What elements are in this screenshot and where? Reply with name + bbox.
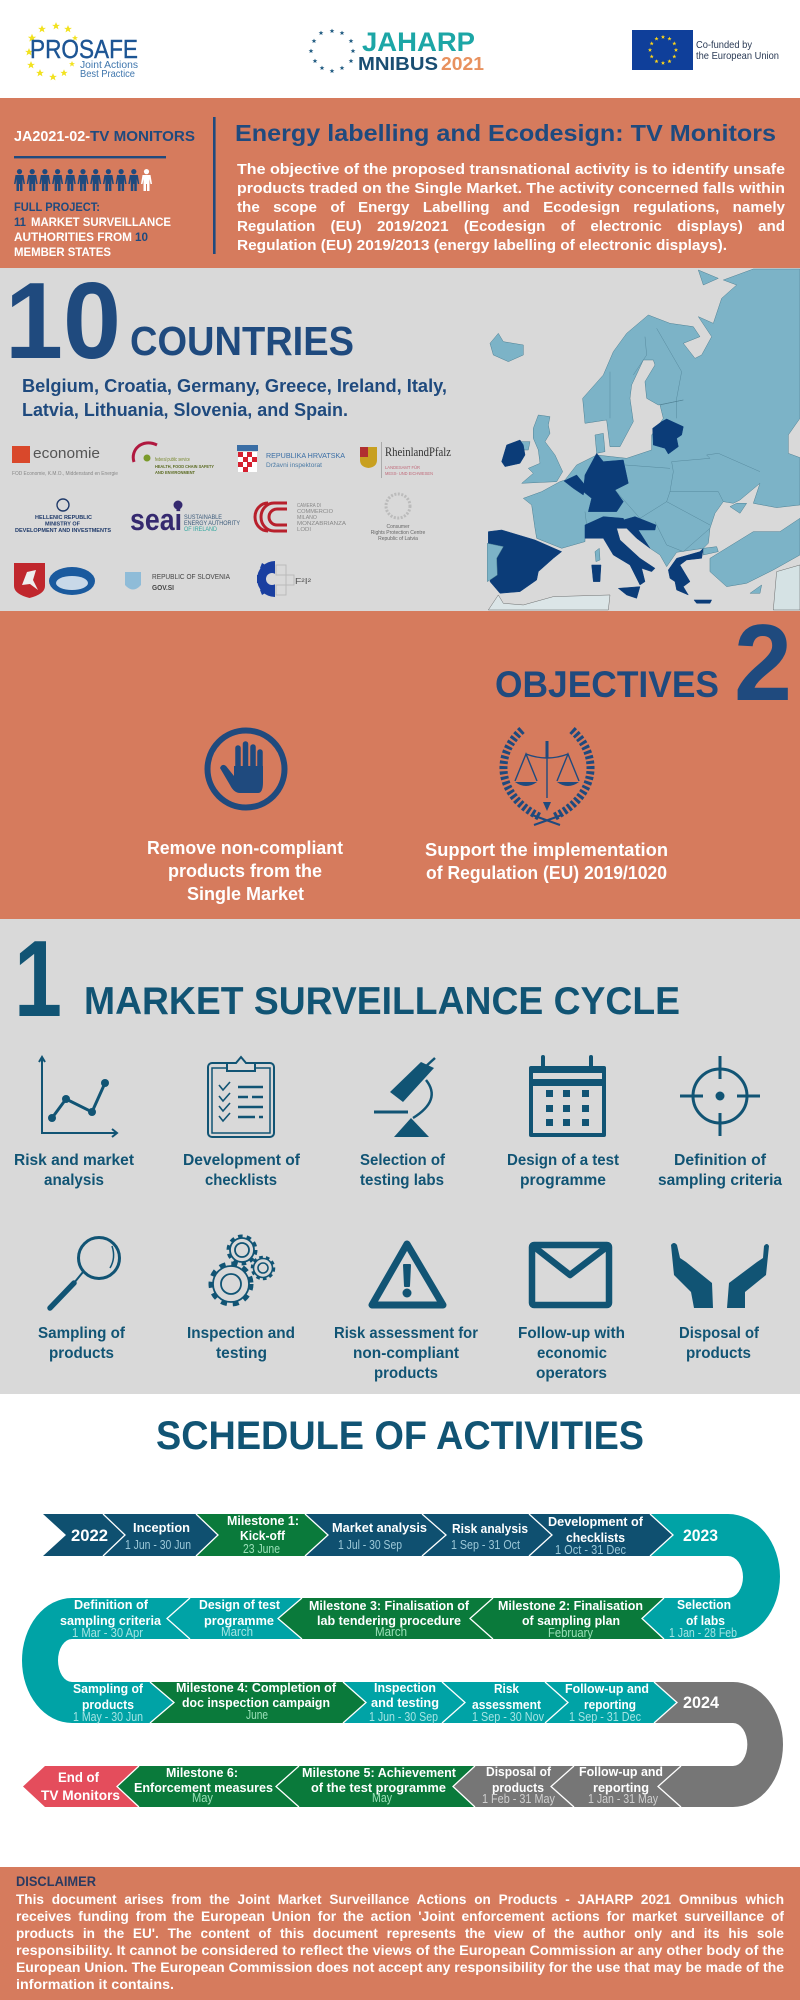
step: design of test programme: Design of test (199, 1598, 281, 1612)
panel: market surveillance cycle (0, 918, 800, 1394)
milestone 5 (302, 1766, 457, 1805)
full project text: 10 (135, 230, 148, 244)
step: risk assessment (334, 1244, 478, 1382)
step: design of test programme (199, 1598, 281, 1639)
step: development of checklists: Development of (548, 1515, 644, 1529)
step: inception: 1 Jun - 30 Jun (125, 1538, 191, 1552)
heading: objectives (495, 602, 792, 724)
Iceland (490, 333, 523, 362)
country list (22, 376, 447, 420)
step: risk assessment: 1 Sep - 30 Nov (472, 1710, 545, 1724)
heading: objectives: OBJECTIVES (495, 664, 719, 705)
step: disposal of products (671, 1243, 769, 1362)
step: inspection and testing: Inspection and (187, 1325, 295, 1342)
disclaimer body: This document arises from the Joint Market Surveillance Actions on Products - JAHARP 2021 Omnibus which (16, 1892, 784, 1907)
step: disposal of products (482, 1765, 556, 1806)
logo: Republika Hrvatska (237, 445, 345, 472)
project code: TV MONITORS (90, 128, 195, 145)
logo: JAHARP Omnibus 2021: JAHARP (362, 27, 475, 57)
objective paragraph: Regulation (EU) 2019/2013 (energy labelling of electronic displays). (237, 237, 727, 254)
logo: federal public service: AND ENVIRONMENT (155, 470, 195, 475)
heading: market surveillance cycle: MARKET SURVEILLANCE CYCLE (84, 980, 680, 1023)
logo: Hellenic Republic (15, 499, 111, 534)
step: inspection and testing: and testing (371, 1696, 439, 1710)
logo: F2I2 (257, 561, 311, 597)
step: disposal of products: products (492, 1781, 544, 1795)
step: risk assessment: non-compliant (353, 1345, 459, 1362)
step: risk assessment: Risk (494, 1682, 519, 1696)
step: risk and market analysis: analysis (44, 1172, 104, 1189)
milestone 6 (134, 1766, 273, 1805)
end of TV Monitors: TV Monitors (41, 1787, 120, 1803)
logo: Republic of Slovenia: GOV.SI (152, 585, 174, 592)
year 2024: 2024 (683, 1694, 720, 1712)
step: follow-up and reporting 2024 (579, 1765, 663, 1806)
Corsica (595, 548, 600, 562)
logo: JAHARP Omnibus 2021 (309, 27, 484, 74)
step: design of test programme: March (221, 1625, 253, 1639)
logo: Consumer Rights Protection Centre Latvia (371, 494, 425, 542)
step: selection of testing labs: Selection of (360, 1152, 446, 1169)
step: disposal of products: products (686, 1345, 751, 1362)
icon: stop hand (208, 730, 284, 808)
milestone 6: May (192, 1791, 214, 1805)
step: design of a test programme (507, 1057, 619, 1189)
milestone 1: Kick-off (240, 1529, 286, 1543)
full project text: AUTHORITIES FROM (14, 230, 132, 244)
heading: schedule of activities: SCHEDULE OF ACTIVITIES (156, 1414, 644, 1458)
step: inspection and testing: testing (216, 1345, 267, 1362)
step: definition of sampling criteria (60, 1598, 162, 1640)
step: sampling of products: products (49, 1345, 114, 1362)
logo: Camera di Commercio: CAMERA DI (297, 503, 321, 509)
disclaimer body: responsibility. It cannot be considered to reflect the views of the European Commission ar any other body of the (16, 1943, 785, 1958)
step: selection of testing labs (360, 1058, 446, 1189)
logo: Republika Hrvatska: REPUBLIKA HRVATSKA (266, 453, 345, 460)
step: selection of labs: 1 Jan - 28 Feb (669, 1626, 737, 1640)
logo: Consumer Rights Protection Centre Latvia: Consumer (386, 524, 410, 530)
panel: objectives (0, 602, 800, 919)
timeline track (22, 1514, 783, 1807)
step: risk assessment: assessment (472, 1698, 542, 1712)
step: development of checklists: Development of (183, 1152, 301, 1169)
step: follow-up and reporting: reporting (584, 1698, 636, 1712)
step: sampling of products (73, 1682, 144, 1724)
step: definition of sampling criteria: sampling criteria (658, 1172, 782, 1189)
icon: eleven people (14, 169, 152, 191)
disclaimer body: products in the EU'. The content of this document represents the view of the author only and its his sole (16, 1926, 784, 1941)
disclaimer body (16, 1892, 785, 1992)
logo: economie (12, 445, 118, 477)
logo: PROSAFE: Joint Actions (80, 59, 138, 71)
logo: Camera di Commercio: MONZABRIANZA (297, 521, 346, 527)
step: market analysis: Market analysis (332, 1521, 427, 1535)
logo: JAHARP Omnibus 2021: MNIBUS (358, 54, 438, 74)
logo: Consumer Rights Protection Centre Latvia: Republic of Latvia (378, 536, 418, 542)
milestone 2: Milestone 2: Finalisation (498, 1599, 643, 1613)
disclaimer heading: DISCLAIMER (16, 1874, 96, 1889)
Arctic islands (698, 270, 718, 285)
logo: Hellenic Republic: DEVELOPMENT AND INVESTMENTS (15, 528, 111, 534)
map of Europe (487, 269, 800, 610)
milestone 1: Milestone 1: (227, 1514, 299, 1528)
step: disposal of products: Disposal of (486, 1765, 552, 1779)
logo: SEAI: ENERGY AUTHORITY (184, 521, 240, 527)
step: risk analysis: Risk analysis (452, 1522, 528, 1536)
step: follow-up and reporting: Follow-up and (565, 1682, 649, 1696)
year 2023: 2023 (683, 1527, 718, 1545)
year 2022: 2022 (71, 1527, 108, 1545)
page header with logos (0, 0, 800, 98)
step: sampling of products: Sampling of (38, 1325, 126, 1342)
milestone 2: February (548, 1626, 594, 1640)
step: design of a test programme: Design of a test (507, 1152, 619, 1169)
logo: economie: FOD Economie, K.M.O., Middenstand en Energie (12, 471, 118, 477)
objective: remove products: Remove non-compliant (147, 837, 343, 858)
milestone 2: of sampling plan (522, 1614, 620, 1628)
logo: Rheinland-Pfalz: MESS- UND EICHWESEN (385, 471, 433, 476)
step: follow-up and reporting (565, 1682, 649, 1724)
logo: Rheinland-Pfalz: RheinlandPfalz (385, 444, 451, 459)
logo: Rheinland-Pfalz: LANDESAMT FÜR (385, 464, 421, 470)
heading: 10 countries: 10 (5, 260, 121, 382)
logo: federal public service: federal public service (155, 457, 190, 463)
icon: laurel wreath and scales (503, 730, 591, 825)
step: definition of sampling criteria: 1 Mar - 30 Apr (72, 1626, 143, 1640)
panel: disclaimer (0, 1867, 800, 2000)
logo: Rheinland-Pfalz (360, 442, 451, 478)
logo: Camera di Commercio: COMMERCIO (297, 509, 334, 515)
milestone 4: Milestone 4: Completion of (176, 1681, 337, 1695)
project code: JA2021-02- (14, 128, 90, 145)
Denmark (595, 433, 605, 453)
step: selection of labs: Selection (677, 1598, 731, 1612)
milestone 3: lab tendering procedure (317, 1614, 461, 1628)
logo: federal public service: HEALTH, FOOD CHAIN SAFETY (155, 464, 214, 469)
objective: support regulation: of Regulation (EU) 2019/1020 (426, 862, 667, 883)
step: inception (125, 1521, 191, 1552)
objective paragraph: The objective of the proposed transnational activity is to identify unsafe (237, 161, 785, 178)
step: risk assessment (472, 1682, 545, 1724)
milestone 3: March (375, 1625, 407, 1639)
logo: JAHARP Omnibus 2021: 2021 (441, 54, 484, 74)
step: inspection and testing: 1 Jun - 30 Sep (369, 1710, 438, 1724)
full project text (14, 200, 171, 259)
milestone 6: Enforcement measures (134, 1781, 273, 1795)
milestone 5: Milestone 5: Achievement (302, 1766, 457, 1780)
logo: Republika Hrvatska: Državni inspektorat (266, 462, 322, 469)
logo: Camera di Commercio: LODI (297, 527, 312, 533)
panel: 10 countries (0, 260, 800, 611)
step: follow-up and reporting 2024: 1 Jan - 31 May (588, 1792, 659, 1806)
step: risk and market analysis (14, 1057, 134, 1189)
logo: Lithuania (14, 563, 95, 598)
objective paragraph: the scope of Energy Labelling and Ecodesign regulations, namely (237, 199, 786, 216)
logo: PROSAFE: PROSAFE (30, 34, 138, 64)
logo: F2I2: F²I² (295, 577, 311, 586)
step: disposal of products: 1 Feb - 31 May (482, 1792, 556, 1806)
step: risk assessment: products (374, 1365, 438, 1382)
step: definition of sampling criteria: sampling criteria (60, 1614, 162, 1628)
end of TV Monitors: End of (58, 1769, 99, 1785)
step: selection of testing labs: testing labs (360, 1172, 444, 1189)
step: design of a test programme: programme (520, 1172, 606, 1189)
objective paragraph (237, 161, 786, 254)
milestone 1: 23 June (243, 1542, 280, 1556)
dark participating countries (488, 419, 712, 603)
logo: EU flag, co-funded by the European Union (632, 30, 779, 70)
step: follow-up with economic operators: operators (536, 1365, 607, 1382)
objective: support regulation: Support the implementation (425, 839, 668, 860)
step: definition of sampling criteria: Definition of (674, 1152, 767, 1169)
step: inspection and testing (187, 1236, 295, 1362)
logo: Hellenic Republic: HELLENIC REPUBLIC (35, 515, 92, 521)
objective paragraph: products traded on the Single Market. The activity concerned falls within (237, 180, 785, 197)
logo: EU flag, co-funded by the European Union: Co-funded by (696, 39, 753, 51)
step: development of checklists (183, 1057, 301, 1189)
logo: economie: economie (33, 445, 100, 462)
objective: remove products: Single Market (187, 883, 304, 904)
milestone 3 (309, 1599, 470, 1639)
logo: Hellenic Republic: MINISTRY OF (45, 522, 80, 528)
milestone 4: June (246, 1708, 268, 1722)
objective: remove products: products from the (168, 860, 322, 881)
step: inception: Inception (133, 1521, 190, 1535)
heading: 10 countries: COUNTRIES (130, 318, 354, 364)
step: sampling of products: Sampling of (73, 1682, 144, 1696)
step: risk assessment: Risk assessment for (334, 1325, 478, 1342)
step: definition of sampling criteria (658, 1056, 782, 1189)
step: disposal of products: Disposal of (679, 1325, 760, 1342)
full project text: 11 (14, 215, 26, 229)
full project text: MEMBER STATES (14, 245, 111, 259)
full project text: MARKET SURVEILLANCE (31, 215, 171, 229)
step: development of checklists (548, 1515, 644, 1557)
Turkey (710, 518, 800, 587)
step: sampling of products (38, 1238, 126, 1362)
objective: support regulation (425, 839, 668, 883)
logo: SEAI (130, 500, 240, 537)
objective paragraph: Regulation (EU) 2019/2021 (Ecodesign of electronic displays) and (237, 218, 785, 235)
disclaimer body: information it contains. (16, 1977, 174, 1992)
step: definition of sampling criteria: Definition of (74, 1598, 149, 1612)
logo: Republic of Slovenia (125, 572, 230, 592)
milestone 4: doc inspection campaign (182, 1696, 330, 1710)
disclaimer body: European Union. The European Commission does not accept any responsibility for the use that may be made of the (16, 1960, 784, 1975)
heading: 10 countries (5, 260, 354, 382)
logo: Republic of Slovenia: REPUBLIC OF SLOVENIA (152, 572, 230, 581)
heading: market surveillance cycle: 1 (14, 918, 62, 1040)
step: inspection and testing (369, 1681, 439, 1724)
UK and Ireland light parts (522, 415, 563, 483)
milestone 5: of the test programme (311, 1781, 446, 1795)
milestone 1 (227, 1514, 299, 1556)
milestone 4 (176, 1681, 337, 1722)
logo: PROSAFE (25, 22, 138, 80)
heading: market surveillance cycle (14, 918, 680, 1040)
step: development of checklists: checklists (205, 1172, 277, 1189)
step: inspection and testing: Inspection (374, 1681, 436, 1695)
country list: Latvia, Lithuania, Slovenia, and Spain. (22, 400, 348, 420)
step: selection of labs: of labs (686, 1614, 725, 1628)
step: design of test programme: programme (204, 1614, 274, 1628)
logo: federal public service (133, 443, 214, 475)
disclaimer body: receives funding from the European Union for the action 'Joint enforcement actions for market surveillance of (16, 1909, 785, 1924)
logo: Camera di Commercio: MILANO (297, 515, 318, 521)
internal borders (585, 328, 760, 552)
milestone 2 (498, 1599, 643, 1640)
step: risk analysis: 1 Sep - 31 Oct (451, 1538, 520, 1552)
logo: Consumer Rights Protection Centre Latvia: Rights Protection Centre (371, 530, 425, 536)
logo: SEAI: OF IRELAND (184, 527, 218, 533)
step: selection of labs (669, 1598, 737, 1640)
logo: SEAI: SUSTAINABLE (184, 515, 222, 521)
mainland light countries (523, 269, 800, 567)
step: follow-up and reporting: 1 Sep - 31 Dec (569, 1710, 641, 1724)
North Africa and Middle East (488, 595, 610, 610)
objective: remove products (147, 837, 343, 904)
full project text: FULL PROJECT: (14, 200, 100, 214)
step: development of checklists: checklists (566, 1531, 625, 1545)
heading: objectives: 2 (734, 602, 792, 724)
step: sampling of products: 1 May - 30 Jun (73, 1710, 143, 1724)
step: market analysis: 1 Jul - 30 Sep (338, 1538, 402, 1552)
logo: SEAI: seai (130, 502, 182, 537)
step: follow-up with economic operators: economic (537, 1345, 607, 1362)
logo: EU flag, co-funded by the European Union: the European Union (696, 50, 779, 62)
step: risk and market analysis: Risk and market (14, 1152, 134, 1169)
step: risk analysis (451, 1522, 528, 1552)
step: sampling of products: products (82, 1698, 134, 1712)
milestone 3: Milestone 3: Finalisation of (309, 1599, 470, 1613)
step: follow-up with economic operators: Follow-up with (518, 1325, 625, 1342)
panel: project summary (0, 98, 800, 268)
step: follow-up and reporting 2024: reporting (593, 1781, 649, 1795)
milestone 6: Milestone 6: (166, 1766, 238, 1780)
Portugal (487, 543, 503, 582)
milestone 5: May (372, 1791, 393, 1805)
country list: Belgium, Croatia, Germany, Greece, Ireland, Italy, (22, 376, 447, 396)
heading: energy labelling: Energy labelling and Ecodesign: TV Monitors (235, 120, 776, 146)
logo: Camera di Commercio (255, 503, 346, 533)
logo: PROSAFE: Best Practice (80, 68, 135, 80)
step: follow-up and reporting 2024: Follow-up and (579, 1765, 663, 1779)
step: development of checklists: 1 Oct - 31 Dec (555, 1543, 626, 1557)
step: market analysis (332, 1521, 427, 1552)
end of TV Monitors (41, 1769, 120, 1803)
project code (14, 128, 195, 145)
step: follow-up with economic operators (518, 1245, 625, 1382)
